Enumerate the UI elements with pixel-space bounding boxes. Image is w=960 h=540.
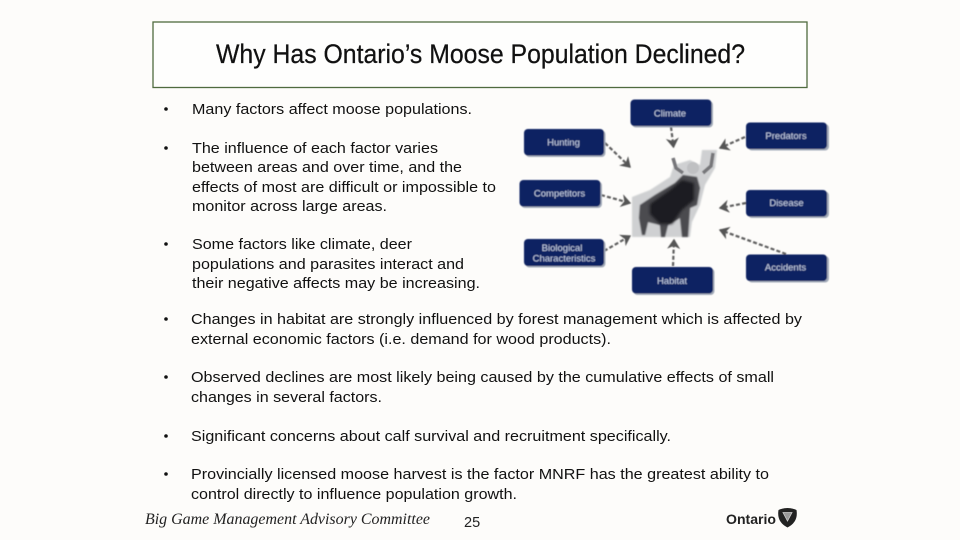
- node: climate: [630, 100, 713, 128]
- arrow: disease: [720, 203, 746, 208]
- node: disease: [746, 190, 829, 218]
- bullet list: upper: Some factors like climate, deer: [192, 237, 412, 253]
- node: climate: Climate: [654, 108, 686, 120]
- arrows: [601, 127, 786, 266]
- node: biological characteristics: Biological: [542, 243, 582, 254]
- bullet list: lower: Significant concerns about calf survival and recruitment specifically.: [191, 429, 671, 445]
- node: biological characteristics: [524, 239, 606, 268]
- node: predators: Predators: [765, 131, 807, 142]
- node: accidents: [746, 254, 829, 282]
- arrow: biological characteristics: [604, 236, 630, 251]
- node: competitors: Competitors: [534, 188, 585, 200]
- node: biological characteristics: Characteristics: [533, 254, 596, 264]
- node: accidents: Accidents: [765, 262, 806, 274]
- bullet list: lower: control directly to influence population growth.: [191, 487, 517, 503]
- footer: page number: 25: [464, 515, 480, 531]
- footer: committee name: Big Game Management Advisory Committee: [145, 511, 430, 528]
- bullet list: upper: effects of most are difficult or impossible to: [192, 180, 496, 196]
- bullet list: lower: [164, 312, 803, 503]
- arrow: competitors: [601, 195, 630, 203]
- arrow: habitat: [673, 240, 674, 266]
- arrow: accidents: [720, 230, 786, 254]
- title panel: [153, 22, 807, 88]
- node: hunting: Hunting: [547, 138, 580, 148]
- bullet list: upper: their negative affects may be increasing.: [192, 276, 480, 292]
- Ontario logo: Ontario: [726, 511, 776, 527]
- node: competitors: [520, 180, 602, 208]
- bullet list: upper: [164, 102, 496, 292]
- bullet list: upper: Many factors affect moose populations.: [192, 102, 472, 118]
- bullet list: lower: Provincially licensed moose harvest is the factor MNRF has the greatest ability to: [191, 467, 769, 483]
- title: Why Has Ontario’s Moose Population Declined?: [216, 39, 745, 69]
- factor diagram: [520, 100, 829, 295]
- bullet list: lower: changes in several factors.: [191, 390, 382, 406]
- bullet list: upper: monitor across large areas.: [192, 199, 387, 215]
- icon: trillium shield: [778, 508, 797, 528]
- bullet list: lower: Observed declines are most likely being caused by the cumulative effects of small: [191, 370, 774, 386]
- arrow: climate: [671, 127, 674, 147]
- arrow: hunting: [605, 143, 630, 167]
- arrow: predators: [720, 137, 745, 148]
- node: hunting: [524, 129, 606, 157]
- bullet list: upper: The influence of each factor varies: [192, 141, 438, 157]
- Ontario logo: [726, 508, 797, 528]
- node: habitat: Habitat: [657, 276, 687, 287]
- moose image: [632, 150, 717, 237]
- bullet list: upper: populations and parasites interact and: [192, 257, 464, 273]
- node: disease: Disease: [769, 198, 804, 209]
- bullet list: lower: external economic factors (i.e. demand for wood products).: [191, 332, 611, 348]
- bullet list: lower: Changes in habitat are strongly influenced by forest management which is affected by: [191, 312, 803, 328]
- node: predators: [746, 122, 829, 150]
- node: habitat: [632, 267, 714, 295]
- bullet list: upper: between areas and over time, and the: [192, 160, 462, 176]
